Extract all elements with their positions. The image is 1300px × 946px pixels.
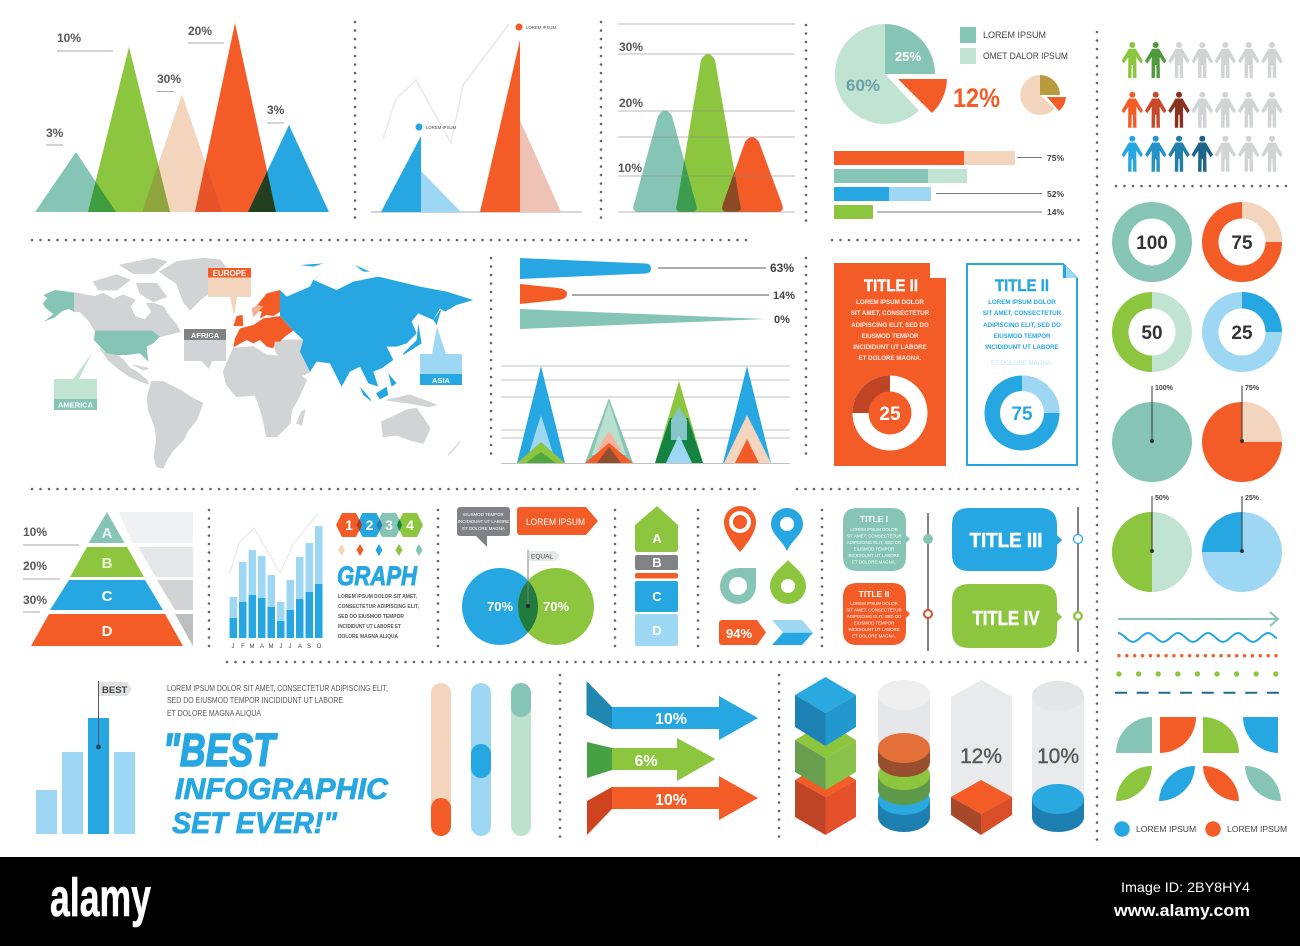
text block [983,299,1062,367]
tile: title II: EIUSMOD TEMPOR [854,620,894,626]
month labels: F [241,644,245,650]
callout: Europe [208,268,251,316]
icon: blue pin [771,508,803,551]
panel: cylinder 10% column [1032,681,1084,832]
label: 20%: 20% [188,24,212,38]
callout: America: AMERICA [58,400,94,410]
panel: orange title card [834,263,946,466]
panel: cylinder 10% column: 10% [1037,745,1079,768]
donut chart: 75 [1011,404,1033,425]
panel: stacked labelled blocks: C [652,589,662,604]
legend: bottom right: LOREM IPSUM [1136,824,1196,834]
text block: EIUSMOD TEMPOR [861,333,919,340]
text block: EIUSMOD TEMPOR [993,333,1051,340]
panel: tapered horizontal bars [520,258,795,329]
icon: teal droplet [720,568,756,604]
tile: title I [843,508,910,571]
panel: stacked labelled blocks: B [652,555,662,570]
callout: Asia [420,327,462,385]
heading: GRAPH: GRAPH [337,561,417,591]
tile: title IV: TITLE IV [972,608,1040,630]
label: 30%: 30% [619,40,643,54]
label: 3% left: 3% [46,126,64,140]
flag: equal [529,551,560,561]
label: 20%: 20% [619,96,643,110]
panel: pyramid: A [102,525,113,542]
panel: line styles [1115,612,1279,693]
panel: gauge pies: 100% [1155,385,1174,392]
panel: pyramid: D [102,623,113,640]
month labels: J [280,644,282,650]
legend: bottom right [1114,821,1287,837]
label: 75%: 75% [1047,153,1064,163]
text block: ET DOLORE MAGNA. [859,355,922,362]
diamonds [338,544,422,556]
panel: best bar chart [36,681,135,834]
panel: cylinder stack [878,680,930,832]
tile: title III: TITLE III [970,530,1042,552]
quote: best infographic set ever: INFOGRAPHIC [175,773,389,806]
numbered hexagons: 4 [406,517,414,533]
donut chart [984,376,1060,450]
label: 3% right: 3% [267,103,285,117]
label: left 70%: 70% [487,599,513,614]
month labels: S [307,644,311,650]
legend: LOREM IPSUM [983,30,1046,40]
numbered hexagons [336,513,423,537]
text block: lorem: LOREM IPSUM DOLOR SIT AMET, CONSECTETUR ADIPISCING ELIT, [167,684,388,693]
label: lorem ipsum red: LOREM IPSUM [526,25,557,30]
callout: grey speech bubble: INCIDIDUNT UT LABORE [458,519,509,524]
region: Europe [233,290,293,348]
panel: quarter shapes [1116,717,1281,801]
panel: donut charts: 75 [1231,233,1253,254]
panel: gauge pies: 75% [1245,385,1260,392]
text block: lorem: SED DO EIUSMOD TEMPOR INCIDIDUNT UT LABORE [167,696,343,705]
panel: overlapping triangle chart [35,23,329,212]
region: Asia [280,263,473,402]
panel: vertical sliders [431,683,531,836]
label: 20%: 20% [23,559,47,573]
text block: LOREM IPSUM DOLOR SIT AMET, [338,594,417,600]
text block: SIT AMET, CONSECTETUR [851,310,930,317]
flag: best: BEST [102,685,128,696]
text block [851,299,930,362]
footer: stock banner [0,857,1300,946]
label: 25%: 25% [895,49,921,64]
panel: gauge pies [1112,385,1282,592]
panel: isometric 12% column: 12% [960,745,1002,768]
icon: orange target pin [724,506,756,552]
panel: donut charts: 25 [1231,323,1253,344]
tile: title II: LOREM IPSUM DOLOR [850,601,898,606]
quote: best infographic set ever: "BEST [163,724,278,776]
tile: title II: INCIDIDUNT UT LABORE [848,627,900,632]
label: 14%: 14% [1047,207,1064,217]
label: 14%: 14% [773,290,795,302]
label: 30%: 30% [23,593,47,607]
arrow: red 10% [587,776,758,835]
legend [960,27,1068,64]
tile: title II [843,583,910,645]
label: 30%: 30% [157,72,181,86]
panel: layered triangle chart [501,366,790,464]
tile: title I: SIT AMET, CONSECTETUR [846,534,902,538]
panel: pie charts and legend [835,24,1068,124]
tag: 94%: 94% [726,626,752,641]
panel: horizontal progress bars [834,151,1064,219]
label: 10%: 10% [618,161,642,175]
panel: gauge pies: 25% [1245,495,1260,502]
callout: grey speech bubble: EIUSMOD TEMPOR [463,512,504,517]
tile: title II: TITLE II [859,589,889,599]
month labels [232,644,322,650]
arrow: green 6% [587,738,716,781]
text block: LOREM IPSUM DOLOR [856,299,924,306]
label: lorem ipsum blue: LOREM IPSUM [426,125,457,130]
tile: title I: TITLE I [860,514,888,524]
label: 12%: 12% [953,83,1000,113]
text block: ADIPISCING ELIT, SED DO [983,322,1061,329]
donut chart [852,376,928,450]
month labels: A [260,644,264,650]
panel: stacked labelled blocks: D [652,623,662,638]
footer: stock banner: www.alamy.com [1113,901,1250,920]
callout: Africa: AFRICA [191,331,220,340]
footer: stock banner: Image ID: 2BY8HY4 [1121,879,1250,895]
quote: best infographic set ever: SET EVER!" [172,807,338,840]
panel: isometric 12% column [951,680,1012,835]
legend: bottom right: LOREM IPSUM [1227,824,1287,834]
numbered hexagons: 1 [345,517,353,533]
panel: bar chart with months [230,513,322,650]
tile: title III [952,508,1062,571]
tile: title I: ADIPISCING ELIT, SED DO [847,540,902,545]
label: 63%: 63% [770,261,794,275]
tile: title I: EIUSMOD TEMPOR [854,546,894,552]
month labels: M [268,644,274,650]
tile: title I: LOREM IPSUM DOLOR [850,527,898,532]
numbered hexagons: 2 [366,517,374,533]
panel: people pictograms [1122,42,1283,172]
label: 52%: 52% [1047,189,1064,199]
panel: venn diagram [457,507,598,645]
month labels: O [317,644,322,650]
tile: title II: ET DOLORE MAGNA. [852,634,896,638]
callout: Africa [184,329,226,369]
callout: America [54,353,97,410]
region: Alaska and USA [43,290,160,362]
panel: pin icons [719,506,813,645]
panel: donut charts: 50 [1141,323,1163,344]
panel: pyramid [23,512,193,646]
label: 60%: 60% [846,76,880,95]
panel: small speech tiles [843,508,933,651]
panel: folded arrows [586,681,758,835]
label: 10%: 10% [23,525,47,539]
icon: green droplet [770,560,806,604]
heading: TITLE II [995,276,1049,295]
text block: INCIDIDUNT UT LABORE ET [338,624,401,630]
month labels: M [250,644,254,650]
label: right 70%: 70% [543,599,569,614]
month labels: J [232,644,234,650]
callout: grey speech bubble: ET DOLORE MAGNA [462,526,505,531]
panel: donut charts [1112,202,1282,372]
panel: large speech tiles [952,507,1082,652]
legend: OMET DALOR IPSUM [983,51,1068,61]
tag: lorem ipsum [517,507,598,535]
panel: donut charts: 100 [1136,233,1168,254]
flag: best [98,682,132,696]
text block: LOREM IPSUM DOLOR [988,299,1056,306]
panel: rounded peak chart [618,24,795,212]
cube: blue [795,677,856,746]
panel: isometric cubes [795,677,856,835]
label: 10%: 10% [57,31,81,45]
arrow: green 6%: 6% [634,753,658,770]
footer: stock banner: alamy [50,868,151,928]
tile: title I: INCIDIDUNT UT LABORE [848,553,900,558]
panel: stacked labelled blocks: A [652,531,662,546]
text block: ET DOLORE MAGNA. [991,360,1053,367]
callout: Asia: ASIA [432,376,451,385]
arrow: red 10%: 10% [655,792,687,809]
tile: title II: ADIPISCING ELIT, SED DO [847,614,902,619]
callout: grey speech bubble [457,507,510,547]
label: 0%: 0% [774,314,790,326]
flag: equal: EQUAL [531,554,553,560]
tile: title I: ET DOLORE MAGNA. [852,560,896,564]
donut chart: 25 [879,404,901,425]
text block: CONSECTETUR ADIPISCING ELIT, [338,604,419,610]
panel: world map [43,258,473,468]
icon: chevron [772,620,813,645]
arrow: blue 10%: 10% [655,711,687,728]
panel: gauge pies: 50% [1155,495,1170,502]
tile: title II: SIT AMET, CONSECTETUR [846,608,902,612]
text block [338,594,419,640]
text block: ADIPISCING ELIT, SED DO [851,322,929,329]
panel: split triangle chart with trend line [371,24,582,212]
text block: SED DO EIUSMOD TEMPOR [338,614,405,620]
tag: lorem ipsum: LOREM IPSUM [526,517,585,528]
text block: INCIDIDUNT UT LABORE [985,344,1059,351]
arrow: blue 10% [586,681,758,740]
quote: best infographic set ever [163,724,389,840]
text block: lorem: ET DOLORE MAGNA ALIQUA [167,709,262,718]
callout: Europe: EUROPE [213,269,247,278]
month labels: A [298,644,302,650]
cube: red [795,762,856,835]
text block: DOLORE MAGNA ALIQUA [338,634,399,640]
tile: title IV [952,584,1062,648]
panel: stacked labelled blocks [635,506,678,646]
text block: SIT AMET, CONSECTETUR [983,310,1062,317]
cube: green [795,722,856,790]
panel: pyramid: B [102,555,113,572]
month labels: J [288,644,292,650]
text block: lorem [167,684,388,718]
small pie [1020,75,1066,115]
numbered hexagons: 3 [385,517,393,533]
text block: INCIDIDUNT UT LABORE [853,344,927,351]
panel: pyramid: C [102,588,113,605]
panel: graph heading block [336,513,423,640]
heading: TITLE II [864,276,918,295]
panel: blue title card [967,263,1078,465]
